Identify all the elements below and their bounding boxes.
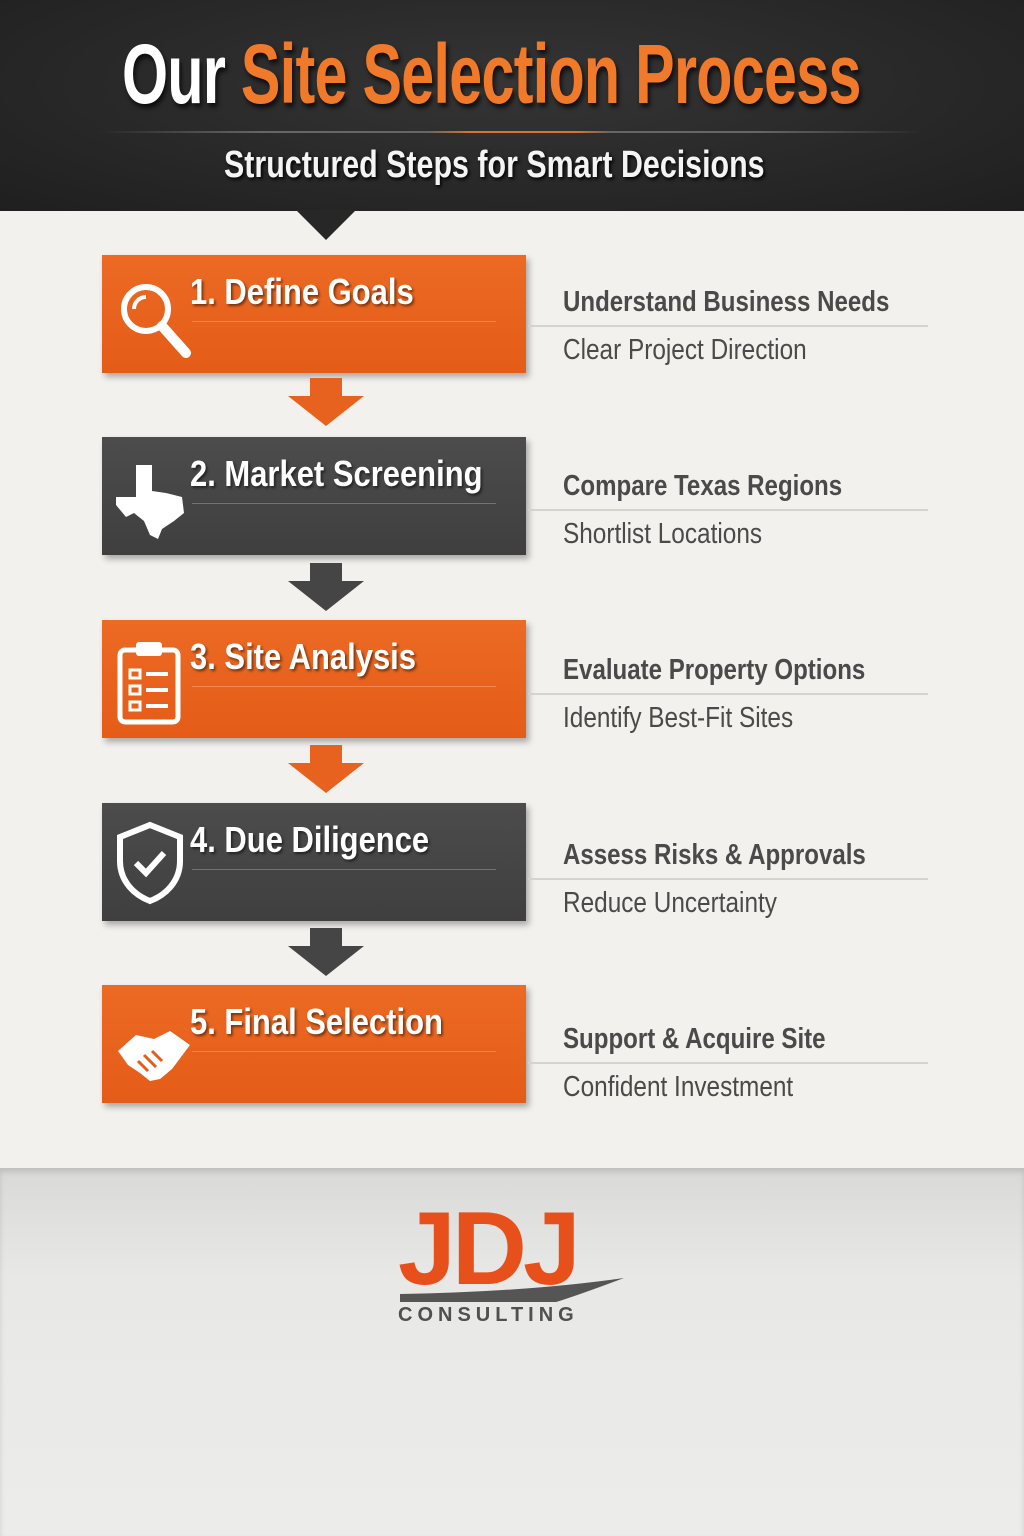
step 5 box — [102, 985, 526, 1103]
icon: handshake — [118, 1031, 190, 1081]
step 4 description: Assess Risks & Approvals — [563, 839, 866, 871]
step 5 description — [528, 1023, 928, 1103]
arrow 2 — [288, 563, 364, 611]
step 3 description: Evaluate Property Options — [563, 654, 865, 686]
logo — [398, 1191, 624, 1326]
step 3 box — [102, 620, 526, 738]
arrow 4 — [288, 928, 364, 976]
arrow 1 — [288, 378, 364, 426]
footer — [0, 1168, 1024, 1536]
step 3 box: 3. Site Analysis — [190, 636, 416, 677]
arrow 3 — [288, 745, 364, 793]
step 4 description — [528, 839, 928, 919]
step 2 description: Shortlist Locations — [563, 518, 762, 550]
step 1 description — [528, 286, 928, 366]
step 5 description: Confident Investment — [563, 1071, 793, 1103]
icon: texas — [116, 465, 184, 539]
step 1 description: Understand Business Needs — [563, 286, 889, 318]
icon: shield check — [117, 822, 183, 904]
step 2 description — [528, 470, 928, 550]
header pointer — [297, 211, 355, 240]
step 5 description: Support & Acquire Site — [563, 1023, 826, 1055]
step 1 description: Clear Project Direction — [563, 334, 807, 366]
logo: JDJ — [398, 1191, 577, 1307]
step 2 box — [102, 437, 526, 555]
step 2 box: 2. Market Screening — [190, 453, 483, 494]
logo: CONSULTING — [398, 1304, 579, 1326]
icon: magnifier — [121, 284, 191, 358]
subtitle: Structured Steps for Smart Decisions — [224, 144, 765, 186]
step 4 box: 4. Due Diligence — [190, 819, 429, 860]
step 3 description — [528, 654, 928, 734]
step 2 description: Compare Texas Regions — [563, 470, 842, 502]
step 4 box — [102, 803, 526, 921]
step 3 description: Identify Best-Fit Sites — [563, 702, 793, 734]
icon: clipboard — [118, 642, 180, 724]
step 1 box: 1. Define Goals — [190, 271, 414, 312]
step 1 box — [102, 255, 526, 373]
header — [0, 0, 1024, 211]
step 5 box: 5. Final Selection — [190, 1001, 443, 1042]
step 4 description: Reduce Uncertainty — [563, 887, 777, 919]
title: Our Site Selection Process — [122, 27, 861, 121]
